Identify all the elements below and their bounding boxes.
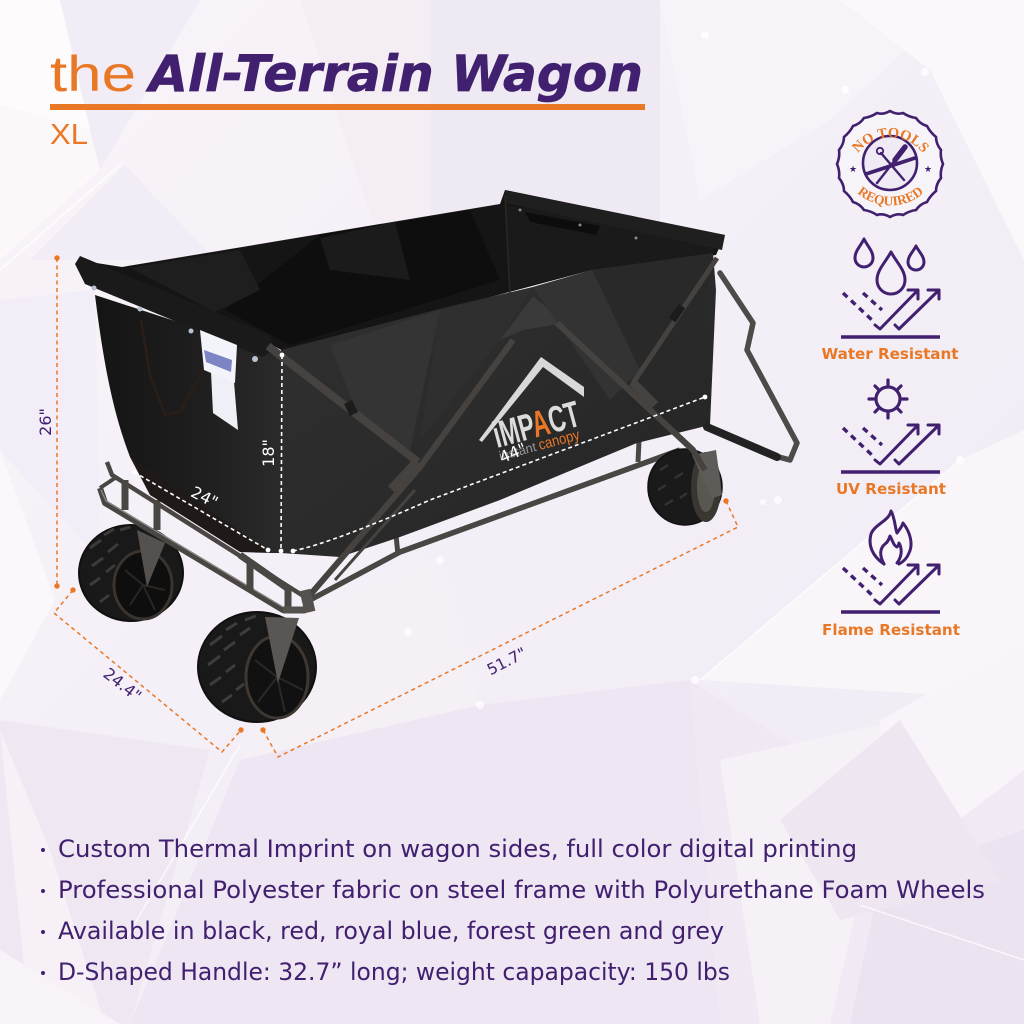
X frame struts (268, 258, 717, 595)
rail grommets (92, 286, 258, 362)
product tag (200, 330, 238, 430)
label: UV resistant: UV Resistant (836, 480, 946, 498)
badge: no tools required (836, 110, 944, 218)
dimension: 44 inch length (291, 395, 707, 553)
bullet 3: Available in black, red, royal blue, forest green and grey (58, 917, 724, 945)
dimension: 26 inch height: 26" (36, 408, 55, 436)
feature bullet list (41, 835, 985, 986)
deflection arrows (841, 565, 940, 612)
inner wagon and back rail (90, 190, 725, 352)
long side panel (281, 253, 716, 557)
frame near side (100, 420, 680, 610)
logo on wagon (479, 357, 587, 464)
dimension: 18 inch height (259, 353, 284, 553)
subtitle XL: XL (50, 119, 88, 151)
deflection arrows (841, 425, 940, 472)
dimension: 51.7 inch length: 51.7" (484, 644, 529, 679)
bullet 2: Professional Polyester fabric on steel frame with Polyurethane Foam Wheels (58, 876, 985, 904)
rear left wheel (79, 525, 183, 621)
badge: no tools required: REQUIRED (857, 186, 922, 207)
title underline (50, 104, 645, 110)
short side panel (95, 295, 281, 553)
flame (870, 511, 911, 564)
front wheel (198, 612, 316, 722)
surface line (841, 335, 940, 339)
icon: water resistant (841, 239, 940, 337)
logo on wagon: instant (497, 439, 538, 463)
badge: no tools required: ★ (924, 165, 932, 175)
title: the (50, 46, 136, 102)
dimension: 18 inch height: 18" (259, 439, 278, 467)
title: All-Terrain Wagon (145, 45, 643, 103)
dimension: 51.7 inch length (260, 498, 738, 757)
bullet 4: D-Shaped Handle: 32.7” long; weight capapacity: 150 lbs (58, 958, 730, 986)
dimension: 24.4 inch depth: 24.4" (100, 664, 145, 705)
sun (869, 380, 907, 418)
badge: no tools required: ★ (849, 165, 857, 175)
badge: no tools required: NO TOOLS (851, 128, 929, 153)
icon: crossed tools (866, 147, 915, 183)
outer dimension lines (36, 255, 738, 757)
deflection arrows (843, 290, 939, 329)
dimension: 24 inch width: 24" (188, 482, 221, 512)
logo on wagon: canopy (537, 426, 582, 454)
label: water resistant: Water Resistant (822, 345, 958, 363)
wagon photo illustration (75, 190, 797, 722)
bullet 1: Custom Thermal Imprint on wagon sides, full color digital printing (58, 835, 857, 863)
icon: flame resistant (841, 511, 940, 612)
inner dimension lines (132, 353, 707, 553)
logo on wagon: iMPACT (488, 393, 584, 456)
water drops (855, 239, 924, 294)
front frame corner (283, 590, 310, 612)
bottom panel strip (130, 457, 272, 553)
pull handle (707, 273, 797, 460)
label: flame resistant: Flame Resistant (822, 621, 960, 639)
panel fold highlights (330, 253, 713, 450)
dimension: 44 inch length: 44" (496, 439, 529, 467)
padded top rail (75, 256, 274, 357)
dimension: 24 inch width (132, 470, 270, 552)
dimension: 26 inch height (36, 255, 60, 589)
rear right wheel (648, 449, 722, 525)
side strap (141, 320, 203, 415)
dimension: 24.4 inch depth (54, 587, 244, 752)
icon: UV resistant (841, 380, 940, 472)
